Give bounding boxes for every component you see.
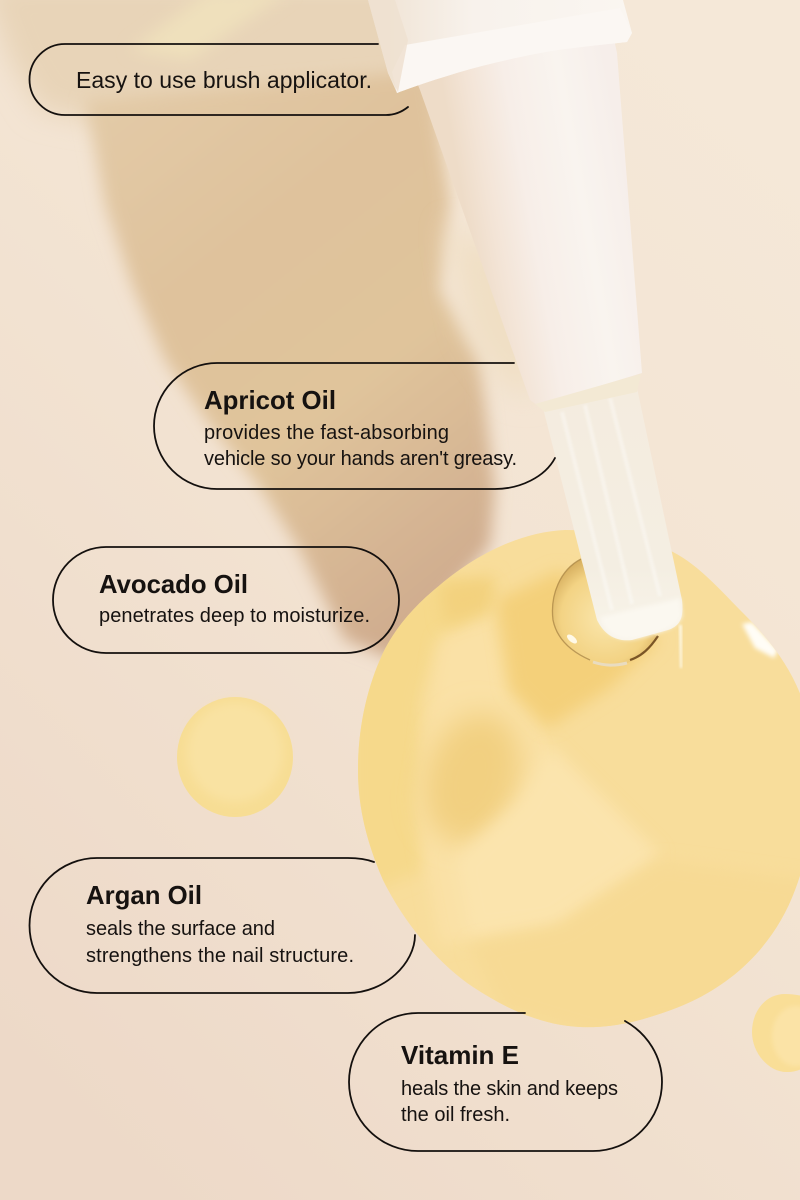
oil shading	[358, 582, 454, 888]
oil pool	[350, 530, 800, 1040]
apricot oil description: provides the fast-absorbing	[204, 422, 449, 444]
avocado oil description: penetrates deep to moisturize.	[99, 605, 370, 627]
small oil drop right	[752, 994, 800, 1072]
callout: vitamin e	[349, 1013, 662, 1151]
argan oil heading: Argan Oil	[86, 880, 202, 910]
vitamin e heading: Vitamin E	[401, 1040, 519, 1070]
callout: argan oil	[29, 858, 415, 993]
oil bead around brush tip	[552, 559, 658, 666]
bottle cast shadow	[0, 0, 545, 660]
bottle cap	[368, 0, 632, 93]
avocado oil heading: Avocado Oil	[99, 569, 248, 599]
vitamin e description: the oil fresh.	[401, 1104, 510, 1126]
small oil drop left	[177, 697, 293, 817]
apricot oil description: vehicle so your hands aren't greasy.	[204, 448, 517, 470]
callout: brush applicator: Easy to use brush applicator.	[76, 67, 372, 93]
apricot oil heading: Apricot Oil	[204, 385, 336, 415]
callout: brush applicator	[30, 44, 408, 115]
brush applicator	[543, 388, 682, 640]
callout: avocado oil	[53, 547, 399, 653]
callout: apricot oil	[154, 363, 555, 489]
argan oil description: strengthens the nail structure.	[86, 945, 354, 967]
vitamin e description: heals the skin and keeps	[401, 1078, 618, 1100]
argan oil description: seals the surface and	[86, 918, 275, 940]
bottle nozzle	[412, 30, 642, 412]
